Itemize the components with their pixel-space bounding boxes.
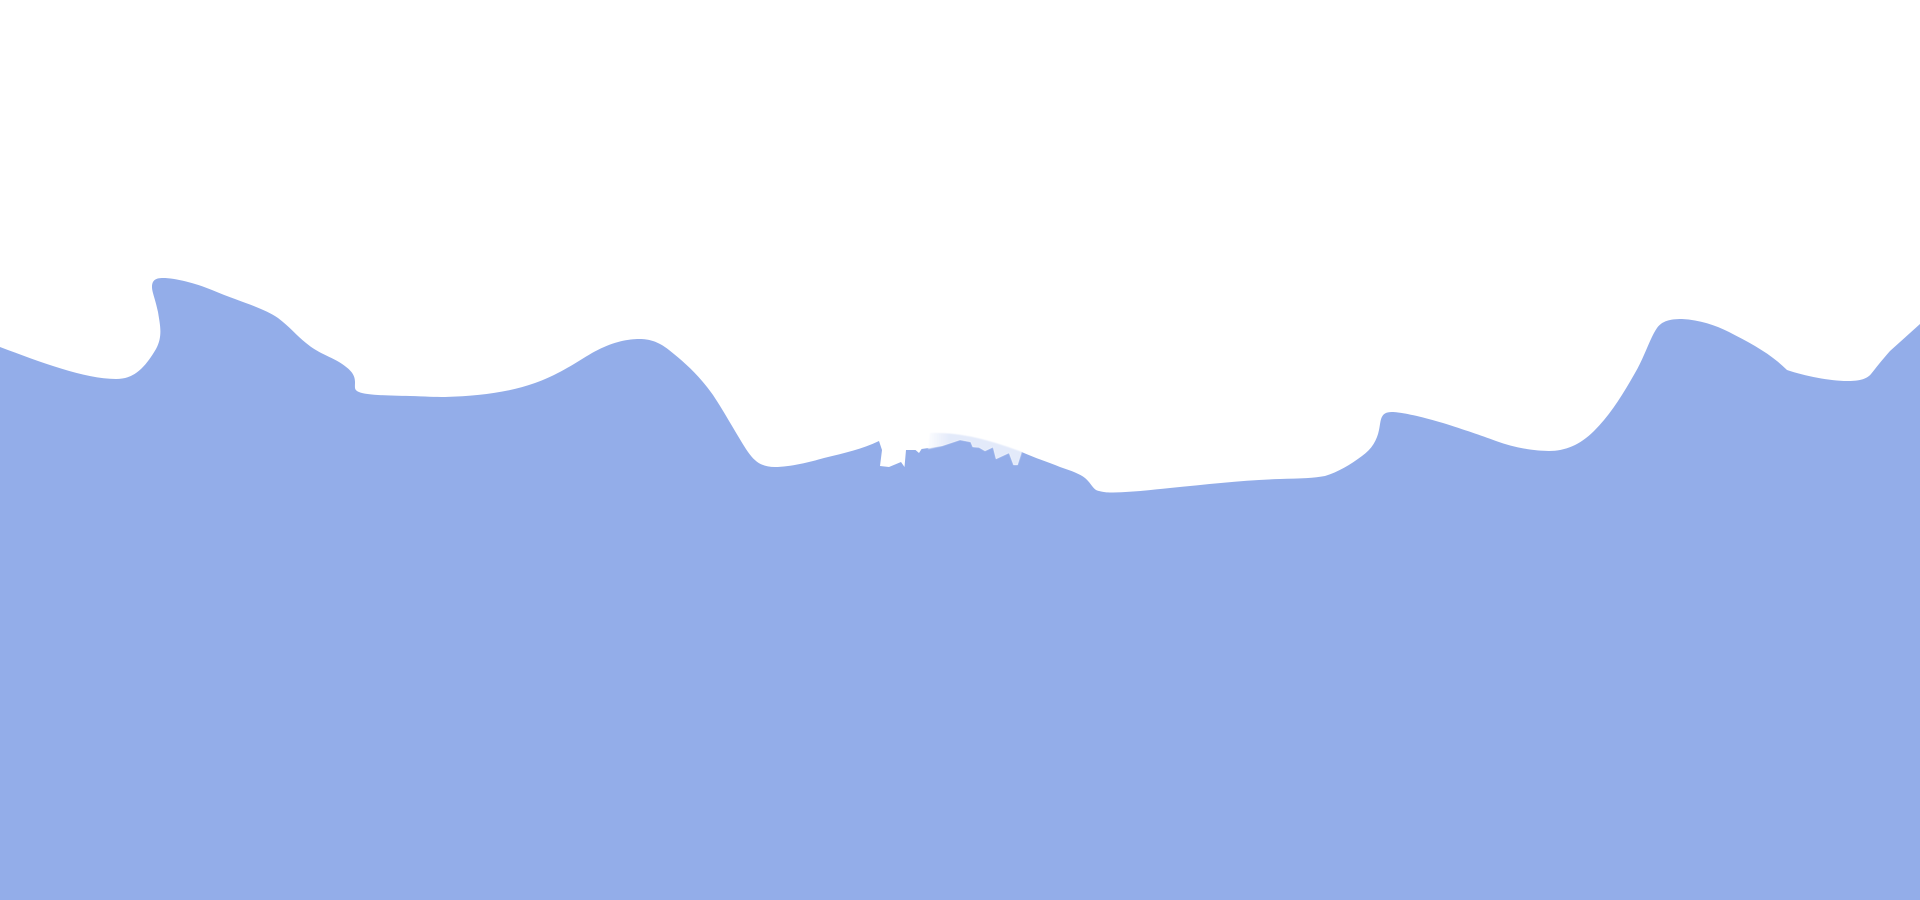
torn highlight patch	[928, 433, 1022, 465]
blue wave shape	[0, 278, 1920, 900]
